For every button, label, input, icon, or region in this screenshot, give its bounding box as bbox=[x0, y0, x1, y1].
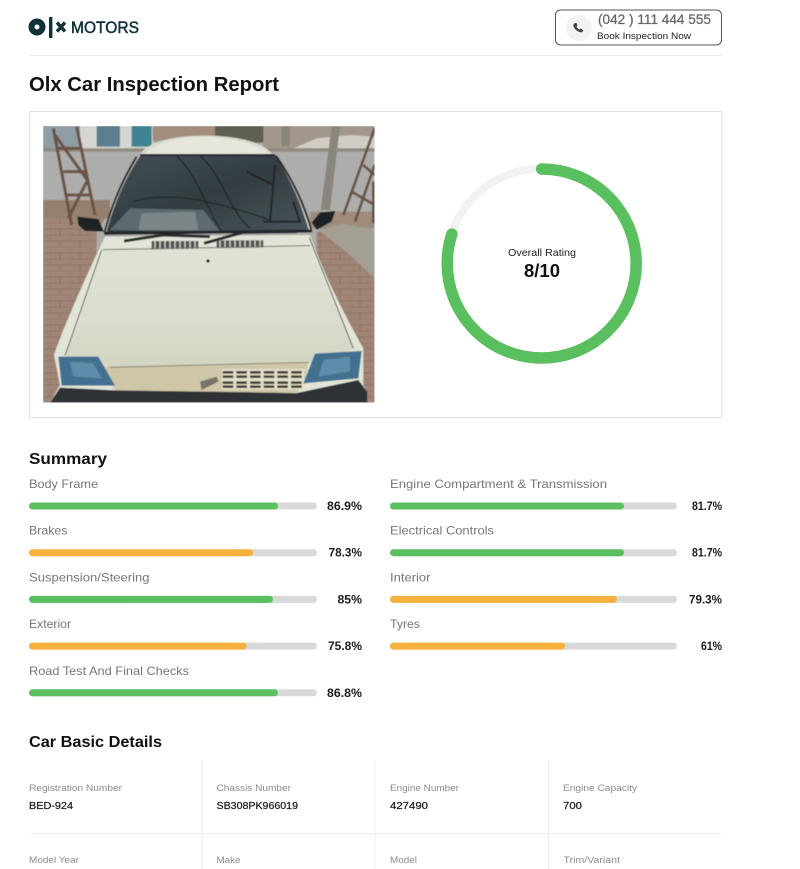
cell: chassis number: Chassis Number bbox=[216, 783, 291, 793]
cell: engine number bbox=[390, 783, 459, 812]
bar: engine compartment and transmission bbox=[390, 477, 722, 513]
windshield bbox=[106, 155, 309, 234]
cell: registration number bbox=[29, 783, 122, 812]
icon: phone bbox=[566, 15, 592, 41]
bar: body frame bbox=[29, 477, 362, 513]
cell: model: Model bbox=[390, 855, 417, 865]
bar: exterior: 75.8% bbox=[328, 639, 362, 653]
bar: electrical controls: 81.7% bbox=[692, 546, 722, 560]
bar: suspension/steering: 85% bbox=[338, 592, 362, 606]
cell: engine capacity: 700 bbox=[563, 801, 582, 812]
cell: chassis number bbox=[216, 783, 298, 812]
bar: body frame: Body Frame bbox=[29, 477, 98, 491]
cell: engine number: Engine Number bbox=[390, 783, 459, 793]
bar: electrical controls: Electrical Controls bbox=[390, 524, 494, 538]
cell: model year: Model Year bbox=[29, 855, 79, 865]
wipers bbox=[124, 232, 297, 243]
headlights bbox=[58, 357, 115, 386]
panel: car photo and overall rating bbox=[30, 112, 722, 418]
bar: brakes bbox=[29, 524, 362, 560]
rating value: 8/10 bbox=[524, 261, 560, 281]
details table bbox=[29, 760, 721, 869]
bar: tyres bbox=[390, 617, 722, 653]
bar: brakes: Brakes bbox=[29, 524, 68, 538]
bar: suspension/steering: Suspension/Steering bbox=[29, 570, 150, 584]
heading: summary: Summary bbox=[29, 451, 107, 468]
bar: road test and final checks bbox=[29, 664, 362, 700]
bar: interior: Interior bbox=[390, 570, 430, 584]
summary bars: left column bbox=[29, 477, 362, 700]
bar: electrical controls bbox=[390, 524, 722, 560]
right tower bbox=[343, 128, 375, 223]
car photo illustration bbox=[43, 126, 375, 403]
cell: engine capacity bbox=[563, 783, 638, 812]
cell: registration number: Registration Number bbox=[29, 783, 122, 793]
summary bars: right column bbox=[390, 477, 722, 653]
bumper bbox=[50, 380, 367, 403]
heading: car basic details: Car Basic Details bbox=[29, 734, 162, 751]
bar: engine compartment and transmission: 81.7% bbox=[692, 499, 722, 513]
cell: make: Make bbox=[216, 855, 240, 865]
vents bbox=[152, 241, 198, 249]
bar: interior bbox=[390, 570, 722, 606]
bar: engine compartment and transmission: Engine Compartment & Transmission bbox=[390, 477, 607, 491]
car body bbox=[50, 235, 367, 403]
left tower bbox=[53, 127, 95, 225]
mirrors bbox=[77, 217, 104, 232]
grille band bbox=[98, 362, 308, 392]
phone call button bbox=[556, 10, 722, 45]
hood bbox=[65, 247, 353, 367]
bar: tyres: 61% bbox=[701, 639, 722, 653]
button caption: Book Inspection Now bbox=[597, 31, 691, 42]
cell: chassis number: SB308PK966019 bbox=[216, 801, 298, 812]
bar: tyres: Tyres bbox=[390, 617, 420, 631]
header logo: OLX Motors bbox=[32, 17, 139, 38]
bar: road test and final checks: 86.8% bbox=[327, 686, 362, 700]
rating label: Overall Rating bbox=[508, 248, 576, 259]
phone number: (042 ) 111 444 555 bbox=[598, 11, 711, 27]
bar: suspension/steering bbox=[29, 570, 362, 606]
cell: engine number: 427490 bbox=[390, 801, 428, 812]
title: Olx Car Inspection Report bbox=[29, 74, 279, 96]
bar: body frame: 86.9% bbox=[327, 499, 362, 513]
cell: engine capacity: Engine Capacity bbox=[563, 783, 638, 793]
cell: trim/variant: Trim/Variant bbox=[564, 855, 621, 865]
rating ring chart bbox=[447, 168, 637, 358]
bar: exterior bbox=[29, 617, 362, 653]
bar: brakes: 78.3% bbox=[328, 546, 362, 560]
header logo: OLX Motors: MOTORS bbox=[71, 18, 139, 37]
cell: registration number: BED-924 bbox=[29, 801, 73, 812]
bar: road test and final checks: Road Test And Final Checks bbox=[29, 664, 189, 678]
bar: exterior: Exterior bbox=[29, 617, 71, 631]
bar: interior: 79.3% bbox=[689, 592, 722, 606]
